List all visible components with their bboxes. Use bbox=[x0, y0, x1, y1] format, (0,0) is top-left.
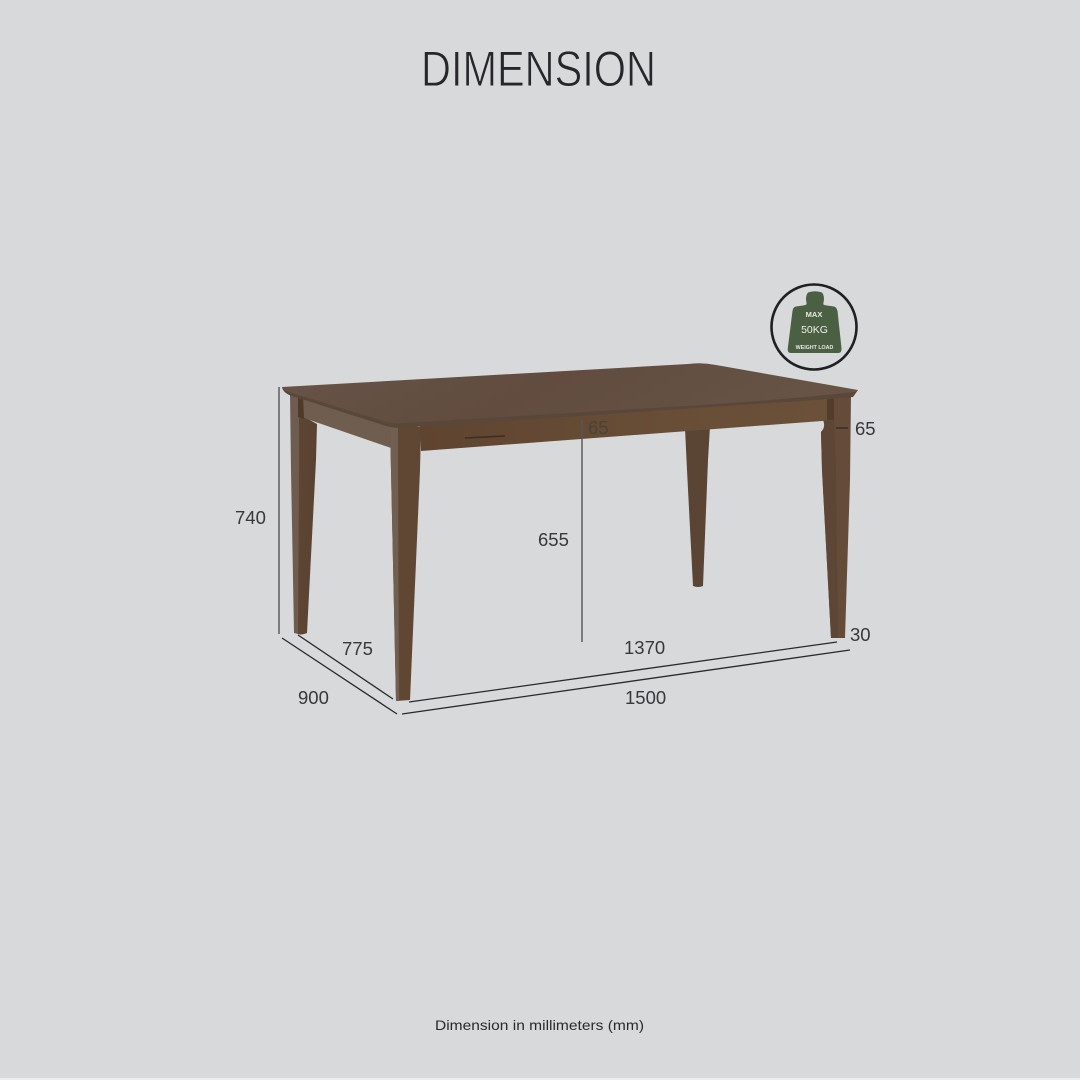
dimension line: 655 clearance bbox=[581, 420, 583, 642]
back right leg bbox=[685, 426, 710, 587]
left side skirt bbox=[303, 396, 392, 448]
front right leg bbox=[821, 394, 851, 638]
label: 740: 740 bbox=[235, 507, 266, 528]
rear left leg light face bbox=[290, 394, 299, 634]
label: 30: 30 bbox=[850, 624, 871, 645]
label: 900: 900 bbox=[298, 687, 329, 708]
dimension line: 740 height bbox=[278, 387, 280, 634]
label: 775: 775 bbox=[342, 638, 373, 659]
icon: weight load badge: WEIGHT LOAD bbox=[796, 345, 834, 351]
dimension line: 775 inner depth bbox=[298, 635, 393, 699]
rear left leg bbox=[296, 394, 317, 634]
title: DIMENSION bbox=[421, 41, 656, 97]
bottom edge strip bbox=[0, 1078, 1080, 1080]
label: 655: 655 bbox=[538, 529, 569, 550]
dimension line: 900 depth bbox=[282, 638, 397, 714]
dimension line: 1370 inner width bbox=[409, 642, 837, 702]
label: 1500: 1500 bbox=[625, 687, 666, 708]
label: 1370: 1370 bbox=[624, 637, 665, 658]
dimension line: 1500 width bbox=[402, 650, 850, 714]
right leg notch bbox=[827, 396, 834, 420]
right leg shaded inner face bbox=[821, 420, 838, 638]
dimension tick: 65 leg bbox=[836, 427, 848, 429]
skirt grain mark bbox=[465, 436, 505, 438]
label: 65 leg: 65 bbox=[855, 418, 876, 439]
icon: weight load badge bbox=[772, 284, 856, 370]
rear left notch bbox=[298, 396, 305, 419]
icon: weight load badge: MAX bbox=[806, 310, 822, 319]
front left leg light face bbox=[390, 425, 399, 701]
tabletop surface bbox=[282, 363, 858, 423]
footer note: Dimension in millimeters (mm) bbox=[435, 1017, 644, 1033]
table bbox=[282, 363, 858, 701]
front left leg bbox=[390, 425, 421, 701]
tabletop edge bbox=[282, 387, 858, 428]
front skirt bbox=[420, 394, 832, 451]
icon: weight load badge: 50KG bbox=[801, 324, 828, 336]
label: 65 skirt: 65 bbox=[588, 417, 609, 438]
